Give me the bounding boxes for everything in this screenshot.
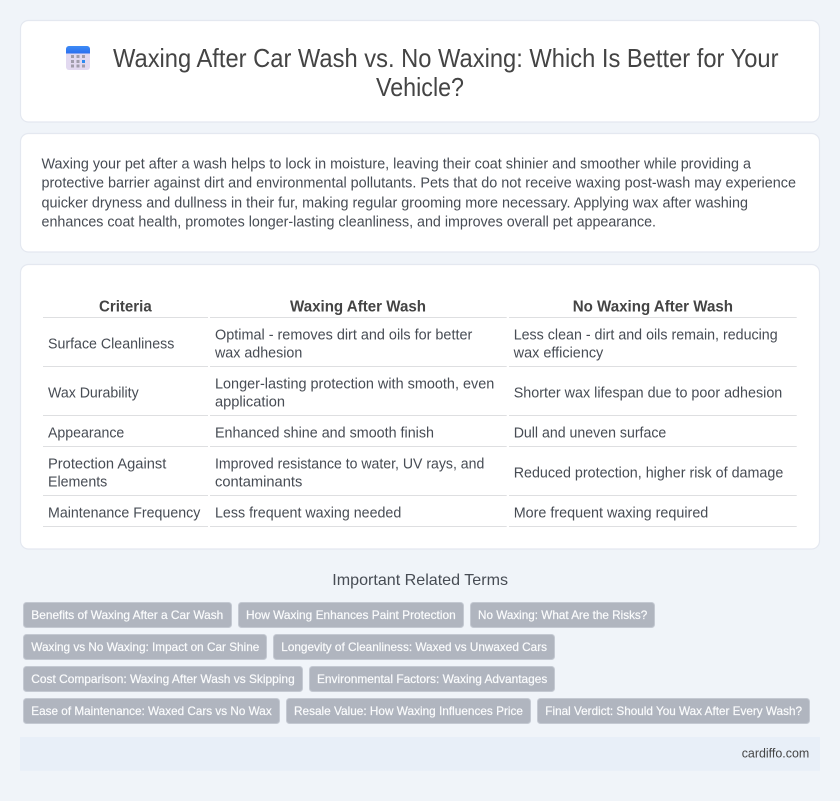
row: protection against elements: Improved resistance to water, UV rays, and [215,456,484,472]
title [113,45,779,102]
tag: Environmental Factors: Waxing Advantages [317,672,547,686]
tag: Benefits of Waxing After a Car Wash [31,608,223,622]
intro paragraph [42,156,796,231]
tag: No Waxing: What Are the Risks? [478,608,648,622]
tag [24,602,232,628]
row: maintenance frequency [48,505,708,521]
row: protection against elements: contaminants [215,474,302,490]
row: appearance: Dull and uneven surface [514,425,666,441]
tag: Final Verdict: Should You Wax After Every Wash? [545,704,802,718]
tag: Ease of Maintenance: Waxed Cars vs No Wax [31,704,272,718]
heading: important related terms: Important Related Terms [332,572,508,589]
row: maintenance frequency: Less frequent waxing needed [215,505,401,521]
row: protection against elements: Protection Against [48,456,166,472]
row: wax durability [48,376,782,410]
tag [286,698,530,724]
tag [24,666,302,692]
footer bar [20,737,820,771]
intro paragraph: Waxing your pet after a wash helps to lock in moisture, leaving their coat shinier and smoother while providing a [42,156,751,172]
intro paragraph: quicker dryness and dullness in their fur, making regular grooming more necessary. Applying wax after washing [42,195,748,211]
table header row [99,299,733,316]
row: surface cleanliness [48,327,778,361]
tag [24,634,266,660]
icon: calendar [66,46,90,70]
row: surface cleanliness: Optimal - removes dirt and oils for better [215,327,473,343]
panel: comparison table [20,264,820,549]
header panel [20,20,820,122]
title: Vehicle? [376,74,464,102]
tag [310,666,554,692]
tag: Resale Value: How Waxing Influences Price [294,704,523,718]
tag: Longevity of Cleanliness: Waxed vs Unwaxed Cars [281,640,547,654]
row: wax durability: Longer-lasting protection with smooth, even [215,376,494,392]
row: surface cleanliness: Surface Cleanliness [48,336,174,352]
panel: intro text [20,134,820,252]
table header row: No Waxing After Wash [573,299,733,316]
tag [470,602,654,628]
row: wax durability: Shorter wax lifespan due to poor adhesion [514,385,782,401]
row: surface cleanliness: wax efficiency [513,345,604,361]
row: wax durability: Wax Durability [48,385,139,401]
row: surface cleanliness: wax adhesion [214,345,302,361]
tags: related terms [24,602,810,724]
row: protection against elements: Elements [48,474,107,490]
row: appearance: Appearance [48,425,124,441]
table header row: Waxing After Wash [290,299,426,316]
row: wax durability: application [215,394,285,410]
tag [538,698,810,724]
tag: How Waxing Enhances Paint Protection [246,608,456,622]
tag [274,634,554,660]
row: protection against elements [48,456,783,490]
intro paragraph: enhances coat health, promotes longer-lasting cleanliness, and improves overall pet appearance. [42,215,656,231]
table header row: Criteria [99,299,152,316]
tag [238,602,464,628]
tag [24,698,280,724]
row: protection against elements: Reduced protection, higher risk of damage [514,465,783,481]
row: maintenance frequency: Maintenance Frequency [48,505,201,521]
title: Waxing After Car Wash vs. No Waxing: Which Is Better for Your [113,45,779,73]
row: appearance: Enhanced shine and smooth finish [215,425,434,441]
row: surface cleanliness: Less clean - dirt and oils remain, reducing [514,327,778,343]
row: appearance [48,425,666,441]
row: maintenance frequency: More frequent waxing required [514,505,708,521]
footer text: cardiffo.com [742,746,809,761]
tag: Waxing vs No Waxing: Impact on Car Shine [31,640,260,654]
tag: Cost Comparison: Waxing After Wash vs Skipping [31,672,295,686]
intro paragraph: protective barrier against dirt and environmental pollutants. Pets that do not receive waxing post-wash may experience [42,176,796,192]
